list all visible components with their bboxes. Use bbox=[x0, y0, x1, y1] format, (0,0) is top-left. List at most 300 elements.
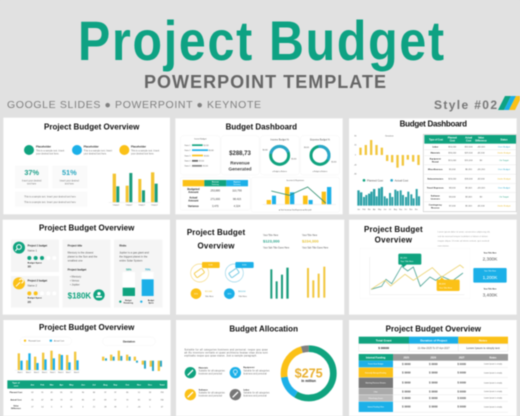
allocation item: materials: Suitable for all categories bbox=[199, 370, 226, 373]
summary table: Summary bbox=[233, 184, 241, 186]
funding table: Externally Managed Funding bbox=[365, 371, 386, 374]
monthly table: 47 bbox=[41, 400, 43, 402]
monthly table: 80 bbox=[126, 392, 129, 394]
heading: Project Budget Overview bbox=[44, 122, 140, 131]
funding table: 2025 bbox=[404, 356, 410, 359]
panel: project budget overview line chart bbox=[349, 220, 517, 315]
allocation item: software: Software bbox=[199, 388, 209, 391]
bar chart: Category 2 bbox=[126, 203, 132, 206]
cost table: Contingency bbox=[429, 203, 443, 206]
headline figures: Your Title Here bbox=[302, 234, 318, 237]
bar chart: planned vs actual: Week 1 bbox=[17, 372, 23, 374]
cost table: Over Budget bbox=[498, 168, 510, 171]
body text: magna aliqua. Ut enim ad minim veniam, quis nostrud bbox=[438, 240, 490, 243]
combo chart: income and expenses: ■ Total Income ■ Total Expenses ■ Net profit bbox=[279, 208, 312, 211]
cost table: Under Budget bbox=[497, 177, 511, 180]
cost table bbox=[423, 134, 516, 212]
card: invest budget bars: Name 2 bbox=[185, 150, 191, 152]
monthly table: 51 bbox=[138, 392, 140, 394]
intro text: ab illo inventore veritatis et quasi architecto beatae vitae dicta sunt bbox=[184, 352, 268, 355]
cost table: On Target bbox=[499, 196, 509, 199]
funding table bbox=[359, 354, 508, 412]
cost table: Type of Cost bbox=[429, 138, 443, 141]
summary table: Duration of Project bbox=[420, 339, 447, 343]
month labels: Apr bbox=[373, 208, 376, 211]
funding table: Internal Funding bbox=[366, 356, 386, 359]
monthly table: 85 bbox=[82, 400, 85, 402]
card: income budget donut: $6,000 bbox=[263, 150, 268, 152]
cost table: -$1,500 bbox=[477, 153, 485, 155]
summary table: 98,415 bbox=[233, 197, 242, 201]
funding table: $ 9999 bbox=[457, 389, 466, 393]
icon: yellow money badge: $ 000 bbox=[209, 265, 213, 267]
stat cards: 2,300K bbox=[483, 257, 498, 262]
allocation item: equipment bbox=[230, 366, 270, 378]
monthly table: 45 bbox=[51, 392, 54, 394]
funding table: Lorem Ipsum is simply bbox=[484, 391, 502, 393]
monthly table: -30 bbox=[138, 407, 141, 409]
bar chart: Category 4 bbox=[151, 203, 158, 206]
monthly table: 33 bbox=[149, 392, 152, 394]
monthly table: 21 bbox=[93, 407, 95, 409]
placeholder items: your desired text here. bbox=[84, 153, 107, 156]
allocation item: labor: Suitable for all categories bbox=[243, 392, 270, 395]
cost table: $50,000 bbox=[448, 147, 457, 149]
allocation item: software: business and personal bbox=[199, 395, 222, 398]
card: invest budget bars: Invest Budget bbox=[194, 138, 207, 141]
funding table: $ 9999 bbox=[429, 405, 438, 409]
monthly table: 90 bbox=[82, 392, 85, 394]
monthly table: May bbox=[69, 384, 74, 386]
cost table: +$1,200 bbox=[477, 169, 486, 171]
monthly table: 73 bbox=[60, 400, 63, 402]
headline figures: Your Sub Title Goes Here bbox=[263, 246, 290, 249]
placeholder items: your desired text here. bbox=[131, 153, 155, 156]
panel: project budget overview cards bbox=[3, 220, 170, 315]
placeholder items: Placeholder bbox=[131, 144, 146, 148]
monthly table: 91 bbox=[41, 392, 43, 394]
heading: Project Budget bbox=[364, 225, 423, 234]
body text bbox=[438, 230, 491, 248]
card: invest budget bars bbox=[180, 136, 220, 175]
card: project details: smallest one bbox=[68, 258, 83, 262]
monthly table: 92 bbox=[70, 392, 72, 394]
allocation item: materials: business and personal bbox=[199, 373, 222, 376]
cost table: Actual bbox=[465, 137, 473, 140]
monthly table: 70 bbox=[126, 400, 129, 402]
platform list: GOOGLE SLIDES ● POWERPOINT ● KEYNOTE bbox=[7, 99, 261, 111]
cost table: Rental bbox=[432, 160, 439, 163]
placeholder items: This is a sample text. Insert bbox=[84, 150, 112, 153]
card: project 2 budget: 2/5 bbox=[28, 302, 32, 304]
month labels: Feb bbox=[363, 209, 366, 211]
card: project 1 budget: 3/5 bbox=[28, 267, 32, 269]
cost table: Reserve bbox=[431, 207, 440, 209]
percent stats: Title Here bbox=[205, 295, 214, 298]
funding table: Notes bbox=[490, 356, 497, 359]
heading: Project Budget bbox=[187, 228, 245, 237]
monthly cost bars bbox=[357, 187, 420, 206]
cost table: Difference bbox=[475, 141, 487, 143]
icon: yellow money badge bbox=[191, 262, 220, 282]
monthly table: 39 bbox=[114, 407, 117, 409]
percent stats: $12,000 bbox=[205, 291, 213, 293]
monthly table: 97 bbox=[104, 392, 106, 394]
monthly table: 793 bbox=[160, 392, 165, 394]
cost table: Travel Expenses bbox=[427, 188, 445, 190]
monthly table: 2 bbox=[127, 407, 128, 409]
allocation item: materials bbox=[185, 367, 226, 378]
card: project details: planet to the Sun and the bbox=[68, 254, 98, 258]
KPI cards: text here bbox=[65, 182, 75, 185]
card: invest budget bars: Name 3 bbox=[185, 155, 191, 157]
KPI cards: Insert your desired bbox=[60, 179, 80, 182]
bar chart: planned vs actual: Week 3 bbox=[34, 372, 39, 374]
heading bbox=[364, 225, 423, 245]
monthly table: Aug bbox=[103, 383, 108, 386]
month labels: Dec bbox=[415, 209, 418, 211]
monthly table: 62 bbox=[31, 392, 33, 394]
cost table: $52,000 bbox=[465, 147, 473, 149]
cost table: Licenses bbox=[431, 198, 441, 200]
monthly table: 81 bbox=[138, 400, 140, 402]
card: income budget donut bbox=[260, 136, 299, 175]
funding table: $ 9999 bbox=[429, 371, 438, 375]
bar chart: planned vs actual: Week 6 bbox=[58, 372, 63, 374]
funding table: $ 9999 bbox=[429, 362, 438, 366]
summary table: Notes bbox=[479, 339, 487, 343]
card: risks: Budget bbox=[148, 299, 155, 302]
panel: project budget overview monthly table bbox=[3, 320, 171, 416]
card: project details: • Jupiter bbox=[70, 282, 80, 286]
summary table: 110,756 bbox=[232, 189, 242, 193]
cost table: $5,500 bbox=[465, 206, 473, 208]
month labels: May bbox=[378, 209, 381, 211]
card: risks: 70% bbox=[145, 267, 151, 271]
cost table: $7,000 bbox=[449, 206, 456, 208]
funding table: $ 9999 bbox=[402, 381, 411, 385]
card: project details: Project budget bbox=[68, 268, 86, 272]
card: income budget donut: ● Budget ● Balance bbox=[272, 170, 287, 173]
icon: blue money badge: $ 000 bbox=[242, 265, 246, 267]
funding table: $ 9999 bbox=[457, 405, 466, 409]
allocation item: software: Suitable for all categories bbox=[199, 392, 226, 395]
callout: yellow: $3,400 bbox=[439, 283, 446, 285]
summary table: 21-Mar-2025 To 07-Apr-2027 bbox=[418, 347, 450, 350]
summary table: 4,324 bbox=[234, 204, 241, 208]
monthly table: 8 bbox=[61, 407, 63, 409]
card: risks: the biggest planet in the bbox=[119, 254, 148, 258]
monthly table: 47 bbox=[161, 407, 163, 409]
deviation chart: Deviation bbox=[385, 135, 393, 138]
monthly table: 38 bbox=[51, 400, 54, 402]
deviation chart: 40 bbox=[354, 145, 356, 147]
monthly table: 27 bbox=[31, 407, 33, 409]
monthly table bbox=[7, 380, 167, 410]
monthly table: Feb bbox=[40, 384, 45, 386]
card: project details bbox=[62, 240, 111, 308]
percent stats: Title Here bbox=[238, 295, 248, 298]
allocation item: labor: business and personal bbox=[243, 395, 267, 398]
card: invest budget bars: Name 1 bbox=[185, 145, 191, 147]
bar chart: planned vs actual: Week 8 bbox=[74, 372, 79, 374]
monthly table: 66 bbox=[93, 392, 96, 394]
monthly table: 32 bbox=[149, 400, 151, 402]
heading: Overview bbox=[375, 236, 413, 245]
card: revenue generated: $288,73 bbox=[229, 151, 251, 157]
heading: Budget Allocation bbox=[229, 324, 298, 333]
summary table: $ 99999 bbox=[378, 346, 389, 350]
funding table: Matching Revenue Streams bbox=[365, 382, 386, 385]
heading: Project Budget Overview bbox=[39, 323, 135, 332]
KPI cards: This is a sample text. Insert your desired text here bbox=[24, 201, 76, 204]
bar chart: Category 1 bbox=[113, 203, 119, 206]
funding table: $ 9999 bbox=[429, 396, 438, 400]
card: project details: Mercury is the closest bbox=[68, 251, 94, 255]
allocation item: equipment: Equipment bbox=[243, 366, 255, 369]
funding table: Lorem Ipsum is simply bbox=[484, 398, 502, 400]
card: invest budget bars: $4,300 bbox=[204, 155, 209, 157]
allocation item: labor: Labor bbox=[243, 389, 249, 391]
bar chart: green bbox=[270, 268, 289, 299]
cost table: Labor bbox=[432, 147, 438, 149]
deviation chart: Deviation bbox=[123, 339, 135, 343]
funding table: $ 9999 bbox=[457, 371, 466, 375]
card: project 1 budget: Name 1 bbox=[28, 249, 37, 253]
funding table: $ 9999 bbox=[402, 362, 411, 366]
cost table: Over Budget bbox=[498, 146, 510, 149]
card: invest budget bars: $4,100 bbox=[203, 166, 208, 168]
donut chart: $275 bbox=[295, 366, 323, 380]
callout: green bbox=[398, 254, 421, 267]
placeholder items: your desired text here. bbox=[36, 153, 60, 156]
cost table: $15,000 bbox=[465, 160, 473, 162]
KPI cards: text here bbox=[27, 182, 37, 185]
legend: Actual Cost bbox=[54, 340, 65, 343]
card: risks bbox=[114, 240, 162, 308]
cost table: Cost bbox=[450, 140, 455, 143]
summary table: Budgeted bbox=[187, 187, 200, 191]
heading: Budget Dashboard bbox=[400, 120, 467, 129]
KPI cards: Insert your desired bbox=[22, 179, 42, 182]
summary table bbox=[359, 337, 508, 351]
card: project 2 budget bbox=[11, 276, 59, 308]
stat cards: 3,400K bbox=[483, 292, 498, 297]
monthly table: Actual Cost bbox=[10, 399, 22, 402]
cost table: $3,000 bbox=[465, 197, 473, 199]
stat cards bbox=[473, 252, 507, 297]
card: project 2 budget: Project 2 budget bbox=[28, 280, 47, 283]
monthly table: 28 bbox=[104, 407, 107, 409]
bar chart: planned vs actual: Week 2 bbox=[26, 372, 31, 374]
card: revenue generated: Revenue bbox=[230, 160, 250, 165]
bar chart: planned vs actual: Week 5 bbox=[50, 372, 55, 374]
cost table: $15,000 bbox=[448, 160, 457, 162]
funding table: $ 9999 bbox=[402, 389, 411, 393]
funding table: Philanthropy Grants bbox=[368, 397, 383, 400]
combo chart: income and expenses: Income & Expenses bbox=[286, 180, 304, 182]
deviation chart: -80 bbox=[354, 173, 357, 175]
headline figures: Your Title Here bbox=[263, 234, 279, 237]
placeholder items bbox=[24, 144, 160, 156]
legend: Planned Cost bbox=[28, 340, 41, 343]
monthly table: 740 bbox=[160, 400, 165, 402]
monthly table: Difference bbox=[11, 407, 22, 410]
cost table: Planned bbox=[448, 138, 457, 140]
monthly table: Apr bbox=[59, 383, 63, 386]
monthly table: 69 bbox=[104, 400, 107, 402]
summary table: Revenue bbox=[212, 182, 219, 184]
monthly table: 35 bbox=[31, 400, 34, 402]
card: invest budget bars: $6,000 bbox=[209, 150, 214, 152]
panel: project budget overview funding table bbox=[349, 320, 517, 416]
subtitle: POWERPOINT TEMPLATE bbox=[144, 72, 386, 92]
cost table: $5,000 bbox=[449, 169, 456, 171]
intro text: Suitable for all categories business and personal. neque quo quae bbox=[184, 348, 268, 351]
cost table: Cost bbox=[466, 140, 471, 143]
placeholder items: This is a sample text. Insert bbox=[131, 150, 160, 153]
headline figures: $123,000 bbox=[263, 239, 280, 244]
cost table: $29,500 bbox=[465, 153, 473, 155]
bar chart: Category 3 bbox=[138, 203, 145, 206]
card: project details: Project title bbox=[68, 244, 83, 248]
monthly table: Planned Cost bbox=[10, 391, 23, 394]
cost table: $20,000 bbox=[448, 178, 457, 180]
cost table: -$1,500 bbox=[477, 206, 485, 208]
funding table: Parent Grant Budget bbox=[368, 363, 384, 366]
card: risks: 58% bbox=[126, 267, 132, 271]
monthly table: 47 bbox=[93, 400, 95, 402]
body text: sed do eiusmod tempor incididunt ut labore et dolore bbox=[438, 235, 489, 238]
card: expense budget donut: $5,000 bbox=[331, 162, 336, 164]
monthly table: 57 bbox=[114, 400, 116, 402]
percent stats: 20% bbox=[194, 293, 198, 295]
donut chart bbox=[284, 349, 333, 398]
cost table: $9,000 bbox=[465, 188, 473, 190]
card: invest budget bars: $4,500 bbox=[204, 145, 209, 147]
callout: green: Your Title Here bbox=[400, 260, 414, 263]
intro text bbox=[184, 348, 268, 358]
cost table: $30,000 bbox=[448, 153, 457, 155]
allocation item: equipment: business and personal bbox=[243, 373, 267, 376]
month labels: Sep bbox=[399, 209, 402, 211]
summary table: Total Grant bbox=[376, 339, 392, 343]
combo chart: income and expenses bbox=[251, 177, 340, 212]
funding table: Lorem Ipsum is simply bbox=[484, 382, 502, 384]
card: project 1 budget bbox=[11, 240, 59, 272]
card: risks: Jupiter is a gas giant and bbox=[119, 251, 149, 255]
card: risks: entire Solar System bbox=[119, 258, 143, 262]
legend bbox=[20, 337, 72, 345]
panel: project budget overview money bbox=[176, 220, 344, 315]
card: revenue generated bbox=[221, 136, 259, 175]
card: risks: Remaining bbox=[124, 302, 133, 304]
month labels: Oct bbox=[404, 208, 407, 211]
funding table: Lorem Ipsum is simply bbox=[484, 406, 502, 408]
monthly table: 6 bbox=[82, 407, 84, 409]
card: risks: Spent bbox=[148, 301, 154, 304]
headline figures bbox=[263, 234, 329, 249]
icon: blue money badge bbox=[225, 262, 254, 282]
panel: budget dashboard with cost table bbox=[349, 118, 517, 214]
monthly table: 1 bbox=[149, 407, 151, 409]
monthly table: Oct bbox=[126, 383, 129, 386]
KPI cards bbox=[15, 166, 87, 207]
card: project 1 budget: Budget Spent bbox=[28, 261, 42, 264]
summary table: Amount bbox=[188, 198, 198, 202]
card: risks: Budget bbox=[125, 299, 132, 302]
allocation item: labor bbox=[230, 389, 270, 400]
stat cards: Your Title Here bbox=[484, 252, 496, 255]
callout: yellow bbox=[437, 277, 460, 291]
cost table: -$2,000 bbox=[477, 178, 485, 180]
card: revenue generated: Generated bbox=[228, 166, 252, 171]
summary table: 3,470 bbox=[212, 204, 219, 208]
cost table: +$1,000 bbox=[477, 188, 486, 190]
legend bbox=[363, 178, 409, 182]
callout: yellow: Your Title Here bbox=[439, 286, 453, 289]
summary table: 253,880 bbox=[211, 189, 221, 193]
cost table: Value bbox=[478, 138, 485, 140]
allocation item: equipment: Suitable for all categories bbox=[243, 370, 270, 373]
percent stats: $24,000 bbox=[238, 291, 246, 293]
monthly table: Mar bbox=[50, 384, 54, 386]
funding table: Internal Funding Other bbox=[367, 406, 384, 409]
cost table: Miscellaneous bbox=[428, 169, 443, 171]
card: invest budget bars: $2,500 bbox=[199, 161, 204, 163]
cost table: On Target bbox=[499, 159, 509, 162]
month labels: Jun bbox=[384, 209, 386, 211]
card: income budget donut: $5,000 bbox=[291, 158, 296, 160]
bar chart: planned vs actual: Week 7 bbox=[66, 372, 71, 374]
donut chart: In million bbox=[301, 379, 316, 383]
bar chart: yellow bbox=[307, 267, 325, 298]
cost table: Subcontractors bbox=[427, 177, 444, 180]
panel: budget dashboard with donuts bbox=[175, 118, 343, 214]
cost table: $8,000 bbox=[449, 188, 456, 190]
stat cards: 1,200K bbox=[483, 275, 498, 280]
funding table: $ 9999 bbox=[402, 371, 411, 375]
funding table: Lorem Ipsum is simply bbox=[484, 372, 502, 374]
bar chart: planned vs actual bbox=[15, 351, 80, 374]
card: expense budget donut: $6,000 bbox=[304, 147, 309, 149]
deviation chart bbox=[354, 135, 420, 175]
callout: green: $1,200 bbox=[400, 257, 408, 259]
cost table: $6,200 bbox=[465, 169, 473, 171]
cost table: Software bbox=[431, 194, 441, 197]
icon: colour stripes bbox=[498, 96, 520, 110]
card: project 2 budget: Budget Spent bbox=[28, 297, 42, 300]
cost table: Materials bbox=[431, 152, 441, 155]
deviation chart: 0 bbox=[355, 155, 356, 157]
funding table: 2027 bbox=[459, 356, 465, 359]
cost table: Status bbox=[500, 138, 508, 141]
cost table: Under Budget bbox=[497, 152, 511, 155]
summary table: Summary bbox=[212, 184, 219, 186]
monthly table: 97 bbox=[114, 392, 116, 394]
summary table: Actual bbox=[189, 195, 198, 199]
panel: project budget overview KPIs bbox=[3, 118, 170, 214]
deviation chart: -40 bbox=[354, 165, 357, 167]
month labels: Jan bbox=[357, 209, 360, 211]
monthly table: Jan bbox=[30, 384, 35, 386]
legend: Actual Cost bbox=[395, 178, 409, 182]
placeholder items: Placeholder bbox=[36, 144, 51, 148]
monthly table: 65 bbox=[60, 392, 63, 394]
summary table bbox=[180, 177, 250, 210]
KPI cards: 51% bbox=[62, 168, 77, 177]
monthly table: Sep bbox=[113, 384, 118, 386]
